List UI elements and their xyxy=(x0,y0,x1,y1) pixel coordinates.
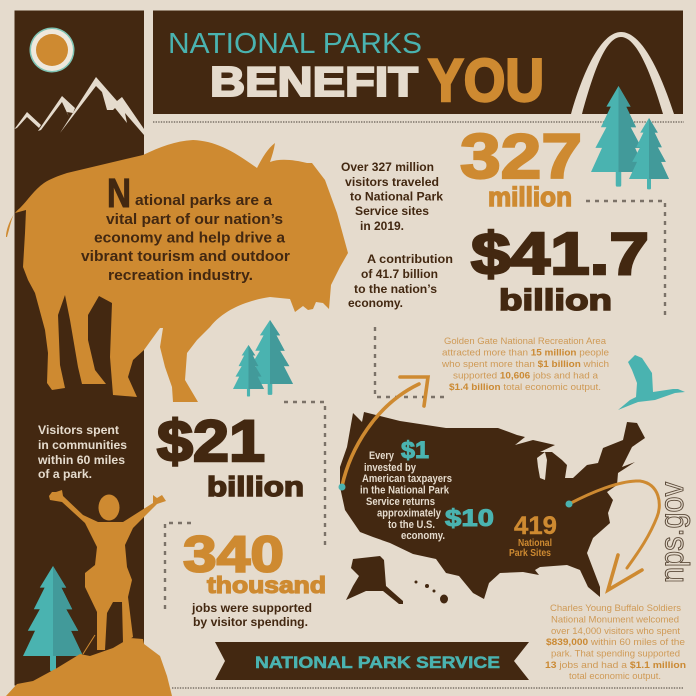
text: golden gate: Golden Gate National Recreation Area xyxy=(444,335,607,346)
stat: 340 thousand: thousand xyxy=(207,572,326,598)
map: United States xyxy=(340,412,645,599)
text: contribution xyxy=(348,252,453,310)
text: contribution: of 41.7 billion xyxy=(361,267,438,281)
hiker silhouette xyxy=(49,490,166,654)
bison text: N xyxy=(107,170,131,216)
bison text: economy and help drive a xyxy=(94,230,286,246)
text: visitors traveled: Over 327 million xyxy=(341,160,434,174)
bison text: vital part of our nation’s xyxy=(106,212,283,228)
stat: 21 billion: billion xyxy=(207,471,304,502)
text: visitors spent: in communities xyxy=(38,438,127,452)
text: visitors spent: Visitors spent xyxy=(38,423,119,437)
connector: 327 to 41.7 xyxy=(586,201,665,320)
left brown panel xyxy=(14,10,144,686)
text: visitors spent: within 60 miles xyxy=(37,453,125,467)
arrow: to charles young xyxy=(569,481,659,590)
text: charles young: total economic output. xyxy=(569,670,661,681)
connector: to map xyxy=(375,327,445,397)
heading: you: YOU xyxy=(428,47,544,114)
icon: crane bird xyxy=(618,355,685,410)
text: visitors traveled: visitors traveled xyxy=(345,175,439,189)
text: charles young: 13 jobs and had a $1.1 million xyxy=(545,659,686,670)
bison text: recreation industry. xyxy=(108,268,253,284)
arrow: to golden gate xyxy=(342,377,428,486)
heading: national parks: NATIONAL PARKS xyxy=(168,28,422,60)
text: every dollar: economy. xyxy=(401,530,445,542)
banner xyxy=(215,642,529,680)
icon: sun xyxy=(30,28,74,72)
text: charles young: National Monument welcomed xyxy=(551,614,679,624)
dotted rule: top xyxy=(153,121,684,123)
connector: 21 xyxy=(284,402,325,548)
text: golden gate xyxy=(441,335,609,392)
dot: golden gate xyxy=(338,484,346,490)
text: nps.gov: nps.gov xyxy=(653,482,690,583)
icon: left tree xyxy=(23,566,83,671)
text: visitors spent: of a park. xyxy=(38,467,92,481)
text: visitors traveled: Service sites xyxy=(355,204,429,218)
stat: 327 million xyxy=(460,122,582,212)
text: golden gate: attracted more than 15 million people xyxy=(442,346,609,358)
text: visitors traveled: in 2019. xyxy=(360,219,404,233)
stat: 21 billion xyxy=(157,409,304,502)
text: charles young xyxy=(545,602,686,681)
stat: 41.7 billion: billion xyxy=(499,284,612,317)
icon: small tree xyxy=(629,118,669,189)
text: visitors traveled: to National Park xyxy=(350,190,443,204)
text: every dollar: approximately xyxy=(377,508,441,520)
text: visitors spent xyxy=(37,423,127,481)
text: contribution: economy. xyxy=(348,296,403,310)
header panel xyxy=(153,10,683,114)
text: every dollar: Every xyxy=(369,450,394,462)
bison text xyxy=(81,170,290,284)
stat: 419: 419 xyxy=(514,512,557,540)
stat: 10 dollars: $10 xyxy=(445,505,494,532)
text: visitors traveled xyxy=(341,160,443,233)
text: contribution: to the nation’s xyxy=(354,282,437,296)
icon: middle small tree xyxy=(233,345,264,396)
text: jobs xyxy=(191,601,312,629)
map: lake michigan xyxy=(537,452,547,480)
icon: mountains xyxy=(14,77,144,135)
text: every dollar: invested by xyxy=(364,462,416,474)
text: every dollar: Service returns xyxy=(366,496,435,508)
text: jobs: jobs were supported xyxy=(191,601,312,615)
text: charles young: over 14,000 visitors who spent xyxy=(551,625,680,636)
text: every dollar xyxy=(360,450,452,542)
stat: 340 thousand: 340 xyxy=(183,526,284,582)
connector: 340 xyxy=(165,523,191,614)
stat: 340 thousand xyxy=(183,526,326,598)
rock xyxy=(6,638,172,696)
icon: middle large tree xyxy=(247,320,293,395)
text: golden gate: $1.4 billion total economic output. xyxy=(449,381,601,392)
dot: charles young xyxy=(566,500,572,508)
dotted rule: bottom xyxy=(172,687,684,689)
text: golden gate: supported 10,606 jobs and had a xyxy=(453,370,599,380)
text: national park sites: National xyxy=(518,538,552,549)
map: hawaii xyxy=(414,580,448,604)
text: golden gate: who spent more than $1 billion which xyxy=(441,358,609,369)
stat: 327 million: million xyxy=(488,182,572,212)
heading: benefit: BENEFIT xyxy=(210,58,418,105)
text: every dollar: American taxpayers xyxy=(362,473,452,485)
map: alaska xyxy=(346,556,403,604)
text: charles young: $839,000 within 60 miles of the xyxy=(546,636,685,647)
stat: 1 dollar: $1 xyxy=(401,437,429,464)
text: contribution: A contribution xyxy=(367,252,453,266)
stat: 327 million: 327 xyxy=(460,122,582,192)
text: every dollar: to the U.S. xyxy=(388,519,435,531)
text: charles young: park. That spending supported xyxy=(551,648,680,658)
bison silhouette xyxy=(6,140,348,402)
stat: 41.7 billion xyxy=(471,221,649,317)
text: national park sites: Park Sites xyxy=(509,548,551,559)
icon: gateway arch xyxy=(571,32,674,114)
banner text: NATIONAL PARK SERVICE xyxy=(255,653,500,672)
text: jobs: by visitor spending. xyxy=(193,615,308,629)
text: charles young: Charles Young Buffalo Soldiers xyxy=(550,602,681,613)
bison text: vibrant tourism and outdoor xyxy=(81,249,290,265)
stat: 21 billion: $21 xyxy=(157,409,265,474)
bison text: ational parks are a xyxy=(135,193,273,209)
text: national park sites xyxy=(509,538,552,559)
text: every dollar: in the National Park xyxy=(360,484,449,496)
icon: tall tree xyxy=(591,86,646,187)
stat: 41.7 billion: $41.7 xyxy=(471,221,649,287)
